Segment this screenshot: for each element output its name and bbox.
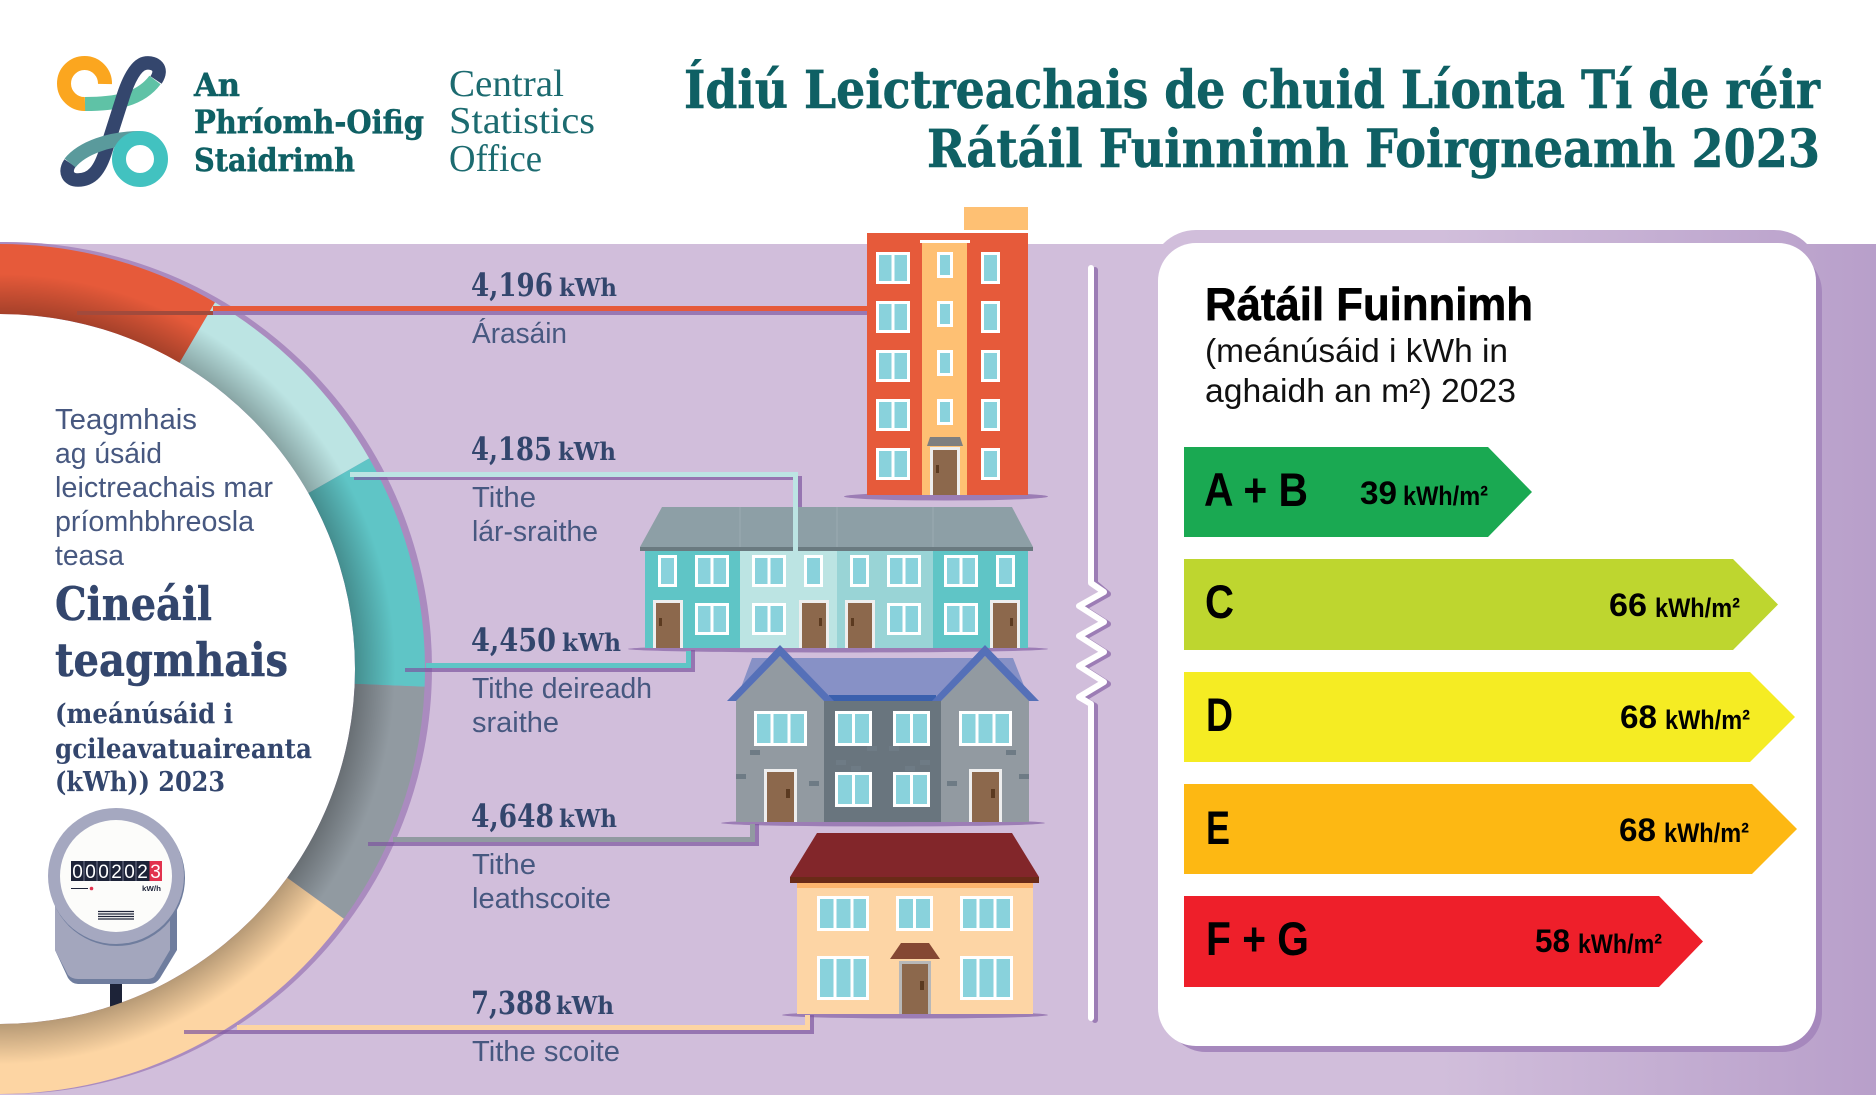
label: end of terrace — [471, 621, 652, 739]
inner white circle — [0, 314, 355, 1024]
intro text: Teagmhais — [55, 404, 197, 436]
ring inner shading — [0, 244, 425, 1094]
label: detached: Tithe scoite — [472, 1036, 620, 1068]
label: apartments: kWh — [559, 273, 617, 302]
label: mid-terrace: Tithe — [472, 482, 536, 514]
ring segment: apartments — [0, 244, 215, 363]
logo Irish name — [193, 66, 424, 179]
donut ring: dwelling types — [0, 244, 425, 1094]
bar: D: D — [1206, 688, 1233, 741]
icon: electricity meter: 2 — [111, 862, 122, 883]
label: semi-detached: kWh — [559, 804, 617, 833]
bar: A + B — [1184, 447, 1532, 537]
label: end of terrace: Tithe deireadh — [472, 673, 652, 705]
label: semi-detached: Tithe — [472, 849, 536, 881]
panel heading: Rátáil Fuinnimh — [1205, 278, 1533, 330]
connector: mid-terrace — [350, 472, 802, 552]
icon: electricity meter: 0 — [72, 862, 83, 883]
sub heading: (meánúsáid i — [55, 699, 233, 730]
logo English name: Office — [449, 138, 542, 180]
logo English name — [449, 63, 595, 180]
bar: E: kWh/m² — [1664, 818, 1749, 848]
icon: electricity meter: 3 — [150, 862, 161, 883]
panel shadow — [1166, 252, 1822, 1052]
label: semi-detached: leathscoite — [472, 883, 611, 915]
icon: electricity meter — [48, 808, 185, 984]
connector: end of terrace — [405, 650, 695, 672]
intro text: teasa — [55, 540, 125, 572]
connector: apartments — [77, 306, 867, 315]
label: mid-terrace — [471, 430, 616, 548]
ring segment: detached — [0, 878, 344, 1094]
label: end of terrace: 4,450 — [471, 621, 556, 659]
bar: F + G: 58 — [1535, 923, 1570, 959]
bar: D: 68 — [1620, 699, 1657, 735]
icon: electricity meter: 0 — [85, 862, 96, 883]
ring halo — [0, 242, 432, 1094]
bar: E: E — [1206, 801, 1230, 854]
bar: E: 68 — [1619, 812, 1656, 848]
bar: D: kWh/m² — [1665, 705, 1750, 735]
ring segment: semi-detached — [287, 684, 425, 919]
label: semi-detached — [471, 797, 617, 915]
logo: Central Statistics Office — [64, 63, 595, 180]
label: detached — [471, 984, 620, 1068]
logo Irish name: Staidrimh — [194, 141, 355, 179]
bar: C — [1184, 559, 1778, 650]
intro text: príomhbhreosla — [55, 506, 255, 538]
building: detached house — [782, 833, 1048, 1018]
logo English name: Statistics — [449, 100, 595, 142]
bar: F + G: kWh/m² — [1578, 929, 1662, 959]
heading: dwelling types — [55, 577, 288, 687]
meter stem — [110, 980, 122, 1022]
bar: F + G: F + G — [1206, 912, 1309, 965]
heading: dwelling types: Cineáil — [55, 577, 212, 631]
page background band — [0, 244, 1876, 1095]
bar: C: C — [1205, 575, 1234, 628]
sub heading: gcileavatuaireanta — [55, 734, 312, 765]
sub heading: (kWh)) 2023 — [55, 767, 225, 798]
bar: C: kWh/m² — [1655, 593, 1740, 623]
label: mid-terrace: kWh — [558, 437, 616, 466]
bar: A + B: kWh/m² — [1403, 481, 1488, 511]
panel halo — [1150, 230, 1820, 530]
separator with resistor zigzag — [1079, 268, 1108, 1020]
logo English name: Central — [449, 63, 564, 105]
icon: electricity meter: 0 — [124, 862, 135, 883]
intro text: leictreachais mar — [55, 472, 273, 504]
logo Irish name: Phríomh-Oifig — [194, 103, 424, 141]
panel: energy rating — [1150, 230, 1822, 1052]
bar: E — [1184, 784, 1797, 874]
label: end of terrace: sraithe — [472, 707, 559, 739]
label: mid-terrace: lár-sraithe — [472, 516, 598, 548]
heading: dwelling types: teagmhais — [55, 633, 288, 687]
label: mid-terrace: 4,185 — [471, 430, 552, 468]
building: apartments — [844, 207, 1048, 500]
left heading text block — [55, 404, 312, 798]
label: apartments: Árasáin — [472, 317, 567, 350]
intro text: ag úsáid — [55, 438, 162, 470]
bar: C: 66 — [1609, 587, 1647, 623]
connector: detached — [184, 1015, 814, 1034]
label: detached: 7,388 — [471, 984, 552, 1022]
bar: F + G — [1184, 896, 1703, 987]
title — [684, 59, 1821, 180]
icon: electricity meter: 0 — [98, 862, 109, 883]
sub heading — [55, 699, 312, 798]
intro text — [55, 404, 273, 572]
icon: electricity meter: kW/h — [142, 886, 161, 893]
panel subheading: (meánúsáid i kWh in — [1205, 332, 1508, 369]
panel card — [1158, 243, 1816, 1046]
label: apartments: 4,196 — [471, 266, 553, 304]
building: mid-terrace and end of terrace row — [628, 507, 1048, 652]
label: semi-detached: 4,648 — [471, 797, 554, 835]
label: end of terrace: kWh — [562, 628, 621, 657]
logo mark — [64, 63, 161, 180]
panel subheading: aghaidh an m²) 2023 — [1205, 372, 1516, 409]
label: detached: kWh — [556, 991, 614, 1020]
ring segment: end of terrace — [308, 458, 425, 687]
label: apartments — [471, 266, 617, 350]
bar: A + B: 39 — [1360, 475, 1397, 511]
icon: electricity meter: 2 — [137, 862, 148, 883]
connector: semi-detached — [368, 824, 759, 846]
logo Irish name: An — [193, 66, 240, 104]
building: semi-detached pair — [721, 645, 1045, 826]
panel subheading — [1205, 332, 1516, 409]
ring segment: mid-terrace — [180, 302, 369, 493]
bar: A + B: A + B — [1204, 463, 1308, 516]
bar: D — [1184, 672, 1795, 762]
